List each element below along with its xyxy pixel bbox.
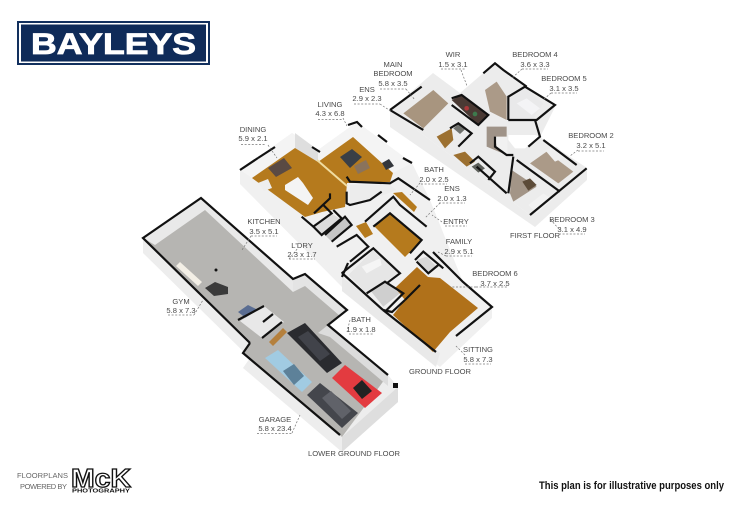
kitchen island: [285, 177, 313, 205]
label: bath lower: [346, 315, 376, 334]
label: main bedroom: MAIN: [384, 60, 402, 69]
label: kitchen: [247, 217, 281, 236]
label: entry: ENTRY: [443, 217, 469, 226]
label: ens lower: ENS: [444, 184, 460, 193]
label: dining: DINING: [240, 125, 266, 134]
dining, kitchen and living timber floor: [252, 137, 393, 217]
label: ens lower: 2.0 x 1.3: [437, 194, 467, 203]
label: bedroom 3: [549, 215, 595, 234]
first floor plan: [390, 63, 587, 227]
label: first floor: FIRST FLOOR: [510, 231, 561, 240]
leader lines: [194, 69, 578, 433]
car: black SUV: [287, 323, 342, 373]
label: kitchen: KITCHEN: [247, 217, 281, 226]
gym and garage floor: [143, 198, 388, 437]
label: living: LIVING: [318, 100, 343, 109]
label: bath upper: 2.0 x 2.5: [419, 175, 449, 184]
logo: floorplans powered by McK Photography: PHOTOGRAPHY: [72, 488, 130, 494]
first floor timber and carpet: [403, 90, 448, 128]
walls base: [240, 122, 492, 367]
stair void: [508, 135, 540, 148]
label: garage: 5.8 x 23.4: [258, 424, 292, 433]
icon: gym equipment: [205, 268, 256, 319]
label: garage: GARAGE: [259, 415, 291, 424]
label: bedroom 3: BEDROOM 3: [549, 215, 595, 224]
outer wall base: [143, 238, 398, 452]
label: bath lower: 1.9 x 1.8: [346, 325, 376, 334]
car: blue: [265, 350, 312, 392]
garage bench: [269, 328, 287, 346]
window walls: [240, 122, 412, 178]
service rooms: [302, 177, 443, 310]
label: gym: GYM: [172, 297, 190, 306]
label: bedroom 4: 3.6 x 3.3: [520, 60, 550, 69]
label: wir: [438, 50, 468, 69]
label: bedroom 3: 3.1 x 4.9: [557, 225, 587, 234]
label: main bedroom: [373, 60, 413, 89]
label: laundry: 2.3 x 1.7: [287, 250, 317, 259]
lower ground floor plan: [143, 198, 398, 452]
walls: [240, 122, 492, 352]
label: bedroom 5: [541, 74, 587, 93]
label: sitting: [463, 345, 493, 364]
logo: floorplans powered by McK Photography: [17, 463, 131, 494]
label: bedroom 4: BEDROOM 4: [512, 50, 558, 59]
label: laundry: L'DRY: [291, 241, 313, 250]
label: family: FAMILY: [446, 237, 472, 246]
label: ens upper: [352, 85, 382, 104]
label: dining: 5.9 x 2.1: [238, 134, 268, 143]
label: gym: [166, 297, 196, 315]
sitting timber floor: [393, 267, 478, 352]
label: bedroom 6: 3.7 x 2.5: [480, 279, 510, 288]
gym bench: [176, 262, 202, 286]
family and entry timber floor: [373, 213, 422, 257]
label: laundry: [287, 241, 317, 259]
label: living: [315, 100, 345, 120]
label: sitting: 5.8 x 7.3: [463, 355, 493, 364]
label: family: [444, 237, 474, 256]
walk in wardrobe: [452, 95, 488, 125]
car: red: [332, 365, 382, 408]
first floor walls: [390, 87, 422, 110]
living furniture: [340, 149, 362, 168]
gym wall faces: [143, 198, 293, 292]
label: lower ground floor: LOWER GROUND FLOOR: [308, 449, 400, 458]
label: living: 4.3 x 6.8: [315, 109, 345, 118]
label: ens upper: 2.9 x 2.3: [352, 94, 382, 103]
label: bedroom 6: BEDROOM 6: [472, 269, 518, 278]
label: ground floor: GROUND FLOOR: [409, 367, 472, 376]
label: bedroom 2: 3.2 x 5.1: [576, 141, 606, 150]
label: main bedroom: 5.8 x 3.5: [378, 79, 408, 88]
logo: Bayleys: [17, 21, 210, 65]
label: bedroom 4: [512, 50, 558, 69]
label: bedroom 6: [472, 269, 518, 288]
label: ens upper: ENS: [359, 85, 375, 94]
label: kitchen: 3.5 x 5.1: [249, 227, 279, 236]
label: bath lower: BATH: [351, 315, 371, 324]
dining furniture: [268, 158, 292, 177]
gym utility room: [240, 306, 284, 338]
label: wir: 1.5 x 3.1: [438, 60, 468, 69]
ground floor plan: [240, 122, 492, 367]
label: gym: 5.8 x 7.3: [166, 306, 196, 315]
label: bath upper: BATH: [424, 165, 444, 174]
logo: floorplans powered by McK Photography: McK: [71, 463, 131, 493]
label: family: 2.9 x 5.1: [444, 247, 474, 256]
walls: [143, 198, 388, 375]
logo: Bayleys: BAYLEYS: [31, 28, 196, 61]
outer walls: [390, 110, 587, 227]
label: ens lower: [437, 184, 467, 203]
car: dark grey: [307, 383, 358, 428]
label: wir: WIR: [446, 50, 461, 59]
label: bedroom 2: BEDROOM 2: [568, 131, 614, 140]
label: bath upper: [419, 165, 449, 184]
logo: floorplans powered by McK Photography: FLOORPLANS: [17, 471, 68, 480]
bathroom tiles: [453, 124, 465, 134]
label: bedroom 2: [568, 131, 614, 151]
label: main bedroom: BEDROOM: [373, 69, 413, 78]
label: bedroom 5: 3.1 x 3.5: [549, 84, 579, 93]
room labels: [166, 50, 614, 458]
logo: floorplans powered by McK Photography: POWERED BY: [20, 482, 67, 491]
bed and furniture: [517, 98, 540, 115]
label: bedroom 5: BEDROOM 5: [541, 74, 587, 83]
label: sitting: SITTING: [463, 345, 493, 354]
label: garage: [257, 415, 292, 434]
label: dining: [238, 125, 268, 144]
